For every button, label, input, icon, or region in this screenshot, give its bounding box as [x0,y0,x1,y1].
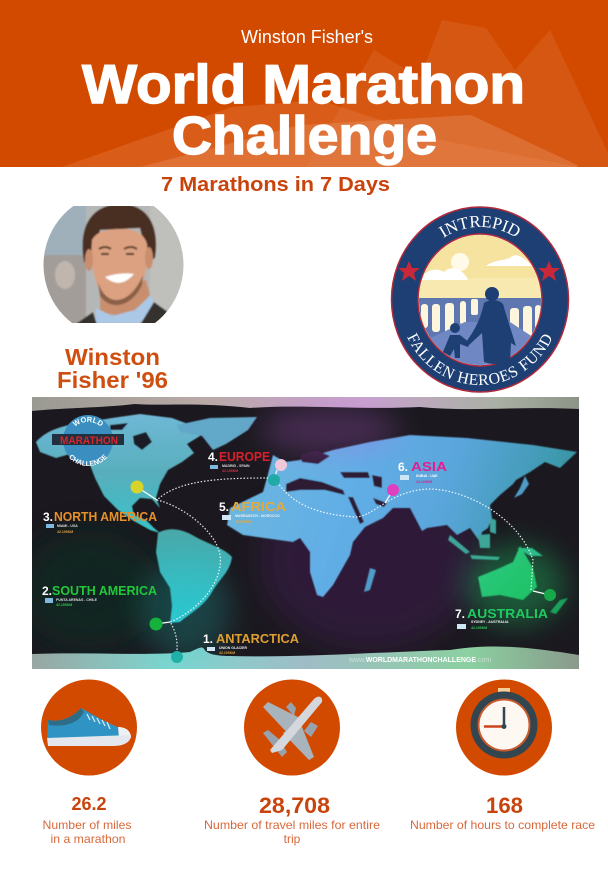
new zealand [550,598,568,614]
logo ring text [407,216,552,386]
label: australia: 7. [455,607,465,621]
label: africa [219,502,286,523]
label: south america: SOUTH AMERICA [52,583,158,598]
beard [98,275,143,305]
label: asia [398,462,446,483]
continents [36,414,577,623]
stat number: 28,708 [259,793,330,818]
stat caption [204,818,380,846]
label: south america [42,586,157,606]
greenland [177,417,257,450]
label: europe: 42.195KM [222,469,238,473]
suit [76,302,168,323]
map website: www.WORLDMARATHONCHALLENGE.com [348,657,491,664]
north america [36,414,200,533]
location pins [130,459,556,663]
label: south america: PUNTA ARENAS - CHILE [56,598,98,602]
australia [478,546,537,600]
icon: shoe [47,708,131,746]
label: europe: EUROPE [219,449,270,464]
neck [100,280,150,318]
label: australia: AUSTRALIA [467,606,549,621]
madagascar [364,568,376,592]
seas [286,472,387,524]
label: antarctica: UNION GLACIER [219,646,247,650]
map bottom strip [32,647,579,669]
stat caption: Number of hours to complete race [410,818,595,832]
header kicker: Winston Fisher's [241,27,373,47]
map logo [52,415,124,466]
label: antarctica: ANTARCTICA [216,631,300,646]
subtitle: 7 Marathons in 7 Days [161,174,390,196]
label: north america: NORTH AMERICA [54,509,158,524]
hair [82,204,156,264]
map logo: CHALLENGE [70,454,108,466]
map glows [140,405,565,660]
main title: Challenge [172,106,437,166]
stat number: 26.2 [71,794,107,814]
label: north america: MIAMI - USA [57,524,78,528]
world map panel [32,397,579,669]
label: europe: 4. [208,450,218,464]
label: asia: 42.195KM [416,480,432,484]
logo stars [398,261,560,281]
label: north america [43,512,157,533]
main title: World Marathon [82,53,525,115]
portrait name: Fisher '96 [57,367,168,393]
figures: mother and child [443,287,516,364]
header banner [0,0,608,167]
icon: stopwatch [470,688,538,758]
main title [82,53,525,166]
label: australia: 42.195KM [471,626,487,630]
portrait name [57,344,168,393]
face [91,229,147,303]
stat caption: in a marathon [50,832,126,846]
label: north america: 42.195KM [57,530,73,534]
label: north america: 3. [43,510,53,524]
label: asia: 6. [398,460,408,474]
label: europe: MADRID - SPAIN [222,464,250,468]
label: asia: ASIA [411,459,448,474]
stat caption: trip [284,832,301,846]
stat number: 168 [486,793,523,818]
papua [517,548,543,556]
south america [156,529,232,623]
stat: hours to complete race [410,680,595,832]
map top strip [32,397,579,411]
eurasia and africa [227,435,577,597]
label: africa: MARRAKECH - MOROCCO [235,514,280,518]
stat: miles in a marathon [41,680,137,846]
stat: travel miles [204,680,380,846]
stat caption [42,818,132,846]
portrait name: Winston [65,344,160,370]
stat caption: Number of travel miles for entire [204,818,380,832]
shirt [95,295,155,323]
label: antarctica: 42.195KM [219,651,235,655]
stat caption: Number of miles [42,818,132,832]
eyes [99,247,137,249]
smile [105,273,134,283]
label: australia [456,609,548,629]
label: south america: 2. [42,584,52,598]
indonesia [448,518,500,560]
map logo: WORLD [72,416,103,426]
route line [157,478,533,650]
label: south america: 42.195KM [56,603,72,607]
map labels [42,449,549,655]
map logo: MARATHON [60,435,118,447]
label: antarctica [204,634,299,654]
label: asia: DUBAI - UAE [416,474,438,478]
icon: plane [263,697,322,760]
label: antarctica: 1. [203,632,213,646]
portrait photo [44,206,184,323]
label: africa: 42.195KM [235,520,251,524]
label: europe [208,452,270,472]
label: africa: AFRICA [231,499,287,514]
label: africa: 5. [219,500,229,514]
label: australia: SYDNEY - AUSTRALIA [471,620,509,624]
logo: Intrepid Fallen Heroes Fund [390,206,570,393]
logo ring text: FALLEN HEROES FUND [407,332,552,386]
hudson bay [110,423,152,450]
japan [514,476,529,498]
logo ring text: INTREPID [438,216,520,238]
